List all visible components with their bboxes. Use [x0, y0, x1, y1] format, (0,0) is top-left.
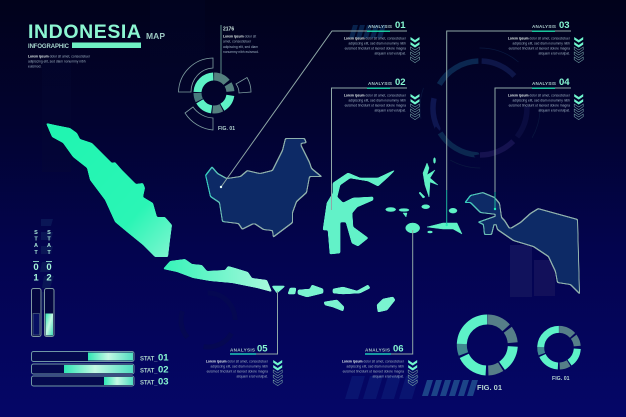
analysis 03 — [508, 20, 583, 63]
large donut chart — [452, 309, 523, 381]
top chart label: FIG. 01 — [218, 126, 235, 132]
analysis 03: aliquam erat volutpat. — [538, 52, 570, 56]
Papua — [464, 192, 580, 295]
analysis 06: Lorem ipsum dolor sit amet, consectetuer — [342, 360, 404, 364]
vertical stat labels: S — [47, 230, 51, 236]
connector line 03 — [446, 30, 571, 226]
analysis 02: 02 — [395, 77, 406, 88]
connector line 02 — [332, 88, 407, 210]
analysis 02: Lorem ipsum dolor sit amet, consectetuer — [344, 94, 406, 98]
analysis 05: ANALYSIS — [230, 348, 255, 352]
connector line 06 — [365, 230, 413, 355]
analysis 06: ANALYSIS — [365, 348, 390, 352]
analysis 04: 04 — [559, 77, 570, 88]
background decoration — [40, 0, 555, 399]
intro text: Lorem ipsum dolor sit amet, consectetuer — [28, 54, 90, 58]
analysis 04: adipiscing elit, sed diam nonummy nibh — [512, 98, 570, 102]
Java — [163, 259, 272, 292]
vertical stat labels: T — [47, 250, 51, 256]
analysis 01: euismod tincidunt ut laoreet dolore magna — [345, 46, 406, 50]
horizontal stat bars — [32, 352, 134, 386]
analysis 03: ANALYSIS — [532, 24, 556, 29]
analysis 04: Lorem ipsum dolor sit amet, consectetuer — [508, 94, 570, 98]
analysis 03: adipiscing elit, sed diam nonummy nibh — [512, 42, 570, 46]
analysis 05: euismod tincidunt ut laoreet dolore magna — [207, 370, 268, 374]
top chart note: 2176 — [223, 26, 234, 32]
analysis 01: 01 — [395, 20, 406, 31]
small donut label: FIG. 01 — [552, 376, 570, 382]
map of Indonesia — [46, 123, 580, 312]
analysis 04: ANALYSIS — [532, 81, 556, 86]
intro text: euismod. — [28, 64, 41, 68]
stat labels: STAT_ — [140, 380, 158, 386]
Kalimantan — [205, 138, 323, 238]
top radial chart — [178, 25, 251, 130]
analysis 06: 06 — [393, 344, 404, 354]
stat labels: 01 — [158, 352, 169, 364]
top chart text: nonummy nibh euismod. — [223, 50, 259, 54]
intro text: adipiscing elit, sed diam nonummy nibh — [28, 60, 86, 64]
large donut label: FIG. 01 — [477, 383, 502, 392]
title: INFOGRAPHIC — [28, 44, 70, 50]
top chart text: adipiscing elit, sed diam — [223, 45, 258, 49]
analysis 01: aliquam erat volutpat. — [374, 52, 406, 56]
connector line 01 — [220, 30, 407, 188]
title — [28, 21, 165, 50]
analysis 03: euismod tincidunt ut laoreet dolore magna — [509, 46, 570, 50]
analysis 05 — [206, 344, 282, 386]
vertical stat labels: T — [34, 250, 38, 256]
connector line 05 — [230, 291, 278, 355]
title: MAP — [146, 31, 165, 41]
stat labels: 02 — [158, 364, 169, 376]
title: INDONESIA — [28, 21, 141, 43]
analysis 04: aliquam erat volutpat. — [538, 108, 570, 112]
analysis 06 — [342, 344, 417, 386]
analysis 02: euismod tincidunt ut laoreet dolore magna — [345, 104, 406, 108]
analysis 02: aliquam erat volutpat. — [374, 108, 406, 112]
vertical stat labels: T — [34, 236, 38, 242]
Maluku islands — [386, 158, 462, 234]
stat labels: 03 — [158, 376, 169, 388]
analysis 02: ANALYSIS — [368, 81, 392, 86]
stat labels: STAT_ — [140, 356, 158, 362]
vertical stat labels: S — [34, 230, 38, 236]
analysis 06: aliquam erat volutpat. — [372, 374, 404, 378]
vertical stat labels: A — [47, 243, 51, 249]
analysis 01: adipiscing elit, sed diam nonummy nibh — [348, 42, 406, 46]
analysis 01: Lorem ipsum dolor sit amet, consectetuer — [344, 36, 406, 40]
vertical stat labels: 0 — [46, 262, 52, 273]
analysis 02: adipiscing elit, sed diam nonummy nibh — [348, 98, 406, 102]
analysis 02 — [344, 77, 420, 120]
Sulawesi — [323, 170, 395, 254]
analysis 04: euismod tincidunt ut laoreet dolore magna — [509, 104, 570, 108]
vertical stat labels — [33, 230, 52, 284]
analysis 04 — [508, 77, 583, 120]
top chart text: Lorem ipsum dolor sit — [223, 34, 256, 38]
vertical stat labels: 1 — [33, 272, 39, 284]
analysis 06: euismod tincidunt ut laoreet dolore magna — [343, 370, 404, 374]
analysis 05: 05 — [257, 344, 268, 354]
analysis 03: 03 — [559, 20, 570, 31]
analysis 01: ANALYSIS — [368, 24, 392, 29]
Sumatra — [46, 123, 172, 257]
connector line 04 — [494, 88, 571, 210]
analysis 05: Lorem ipsum dolor sit amet, consectetuer — [206, 360, 268, 364]
stat labels — [140, 352, 169, 388]
stat labels: STAT_ — [140, 368, 158, 374]
vertical stat labels: 0 — [33, 262, 39, 273]
vertical stat labels: T — [47, 236, 51, 242]
small donut chart — [534, 322, 584, 373]
vertical stat labels: A — [34, 243, 38, 249]
vertical stat bars — [32, 288, 54, 336]
analysis 05: aliquam erat volutpat. — [236, 374, 268, 378]
top chart text: amet, consectetuer — [223, 40, 252, 44]
vertical stat labels: 2 — [46, 272, 52, 284]
analysis 03: Lorem ipsum dolor sit amet, consectetuer — [508, 36, 570, 40]
analysis 05: adipiscing elit, sed diam nonummy nibh — [210, 364, 268, 368]
analysis 01 — [344, 20, 420, 63]
Lesser Sunda islands — [272, 285, 395, 312]
analysis 06: adipiscing elit, sed diam nonummy nibh — [346, 364, 404, 368]
